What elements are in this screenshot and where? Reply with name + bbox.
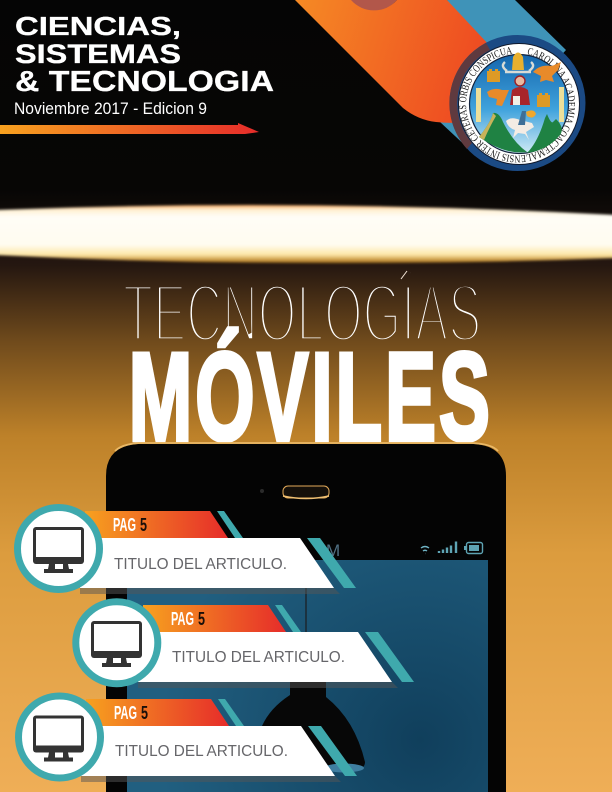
icon: monitor [33,716,84,762]
seal sky [470,54,568,154]
seal columns [476,87,564,122]
seal rider [506,110,536,140]
phone speaker [260,486,329,498]
page number: 5 [198,609,205,629]
page label: PAG [114,703,137,723]
white panel [80,538,334,588]
glowing light band [0,205,612,263]
university seal [449,35,586,171]
banner shadow [81,776,341,782]
phone gold rim [115,443,498,451]
teal stripe large [307,538,356,588]
page label: PAG [113,515,136,535]
seal white band [458,43,580,165]
seal lions [487,62,561,106]
heading: móviles: MÓVILES [129,327,490,467]
page tab [86,699,229,726]
seal towers [487,69,550,107]
icon: monitor [91,621,142,667]
title [15,11,274,98]
seal mountains [479,113,562,153]
teal stripe small [218,699,244,726]
page number: 5 [141,703,148,723]
white panel [138,632,392,682]
banner 1 [18,508,356,594]
top ribbon: orange [295,0,490,123]
top ribbon: blue [440,0,566,150]
status icon: battery [464,542,482,554]
top ribbon: small circle [343,0,404,11]
article title: TITULO DEL ARTICULO. [115,743,288,760]
white panel [81,726,335,776]
arrow bar [0,123,259,134]
article title: TITULO DEL ARTICULO. [114,556,287,573]
status clock: M [326,541,340,560]
seal tiara [503,52,533,72]
status icon: wifi [421,546,429,554]
page label: PAG [171,609,194,629]
phone [106,443,506,792]
seal outer ring [450,35,586,171]
banner 3 [18,696,357,782]
seal saint [510,76,530,105]
lamp light [324,764,364,772]
icon circle [18,508,100,590]
banner shadow [80,588,340,594]
page tab [85,511,228,538]
phone screen [127,560,488,792]
teal stripe small [275,605,301,632]
teal stripe small [217,511,243,538]
page number: 5 [140,515,147,535]
lamp cable [305,560,307,650]
icon circle [76,602,158,684]
page tab [143,605,286,632]
heading: tecnologías: TECNOLOGÍAS [123,268,481,359]
status icon: signal [439,542,456,553]
phone body [106,444,506,792]
banner shadow [138,682,398,688]
banner 2 [76,602,414,688]
seal shaded ring [449,43,490,149]
lamp [262,682,365,771]
title line 3: & TECNOLOGIA [15,66,274,98]
edition date: Noviembre 2017 - Edicion 9 [14,100,207,118]
teal stripe large [365,632,414,682]
icon: monitor [33,527,84,573]
article title: TITULO DEL ARTICULO. [172,649,345,666]
seal lettering: CAROLINA ACADEMIA COACTEMALENSIS INTER CETERAS ORBIS CONSPICUA [459,47,575,162]
icon circle [18,696,100,778]
title line 1: CIENCIAS, [15,11,181,41]
teal stripe large [308,726,357,776]
title line 2: SISTEMAS [15,39,181,69]
